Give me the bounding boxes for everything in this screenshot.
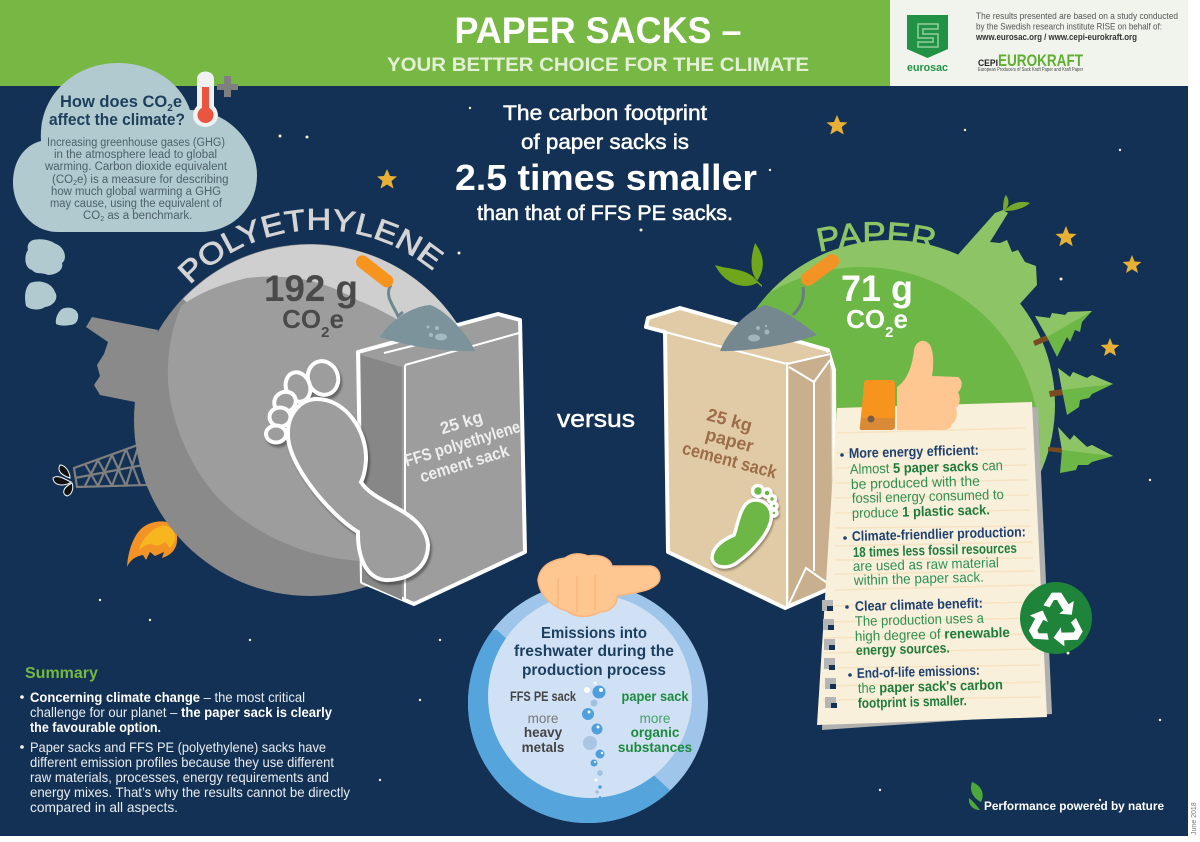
callout body: 2	[100, 216, 104, 223]
icon: leaf	[969, 782, 983, 810]
column: paper sack: substances	[618, 740, 692, 755]
unit: CO2e: 2	[885, 324, 893, 341]
emission value: 71 g: 71 g	[841, 268, 913, 309]
icon: small clouds	[25, 239, 78, 326]
panel: freshwater emissions	[468, 553, 708, 823]
callout body: in the atmosphere lead to global	[54, 149, 217, 161]
icon: footprint (paper)	[712, 486, 777, 567]
callout body: how much global warming a GHG	[51, 186, 221, 198]
icon: sprout on chimney	[1003, 195, 1030, 211]
callout heading: e	[173, 93, 182, 111]
panel heading: Emissions into	[541, 625, 647, 642]
unit: CO2e: CO	[846, 304, 885, 334]
logo: eurosac	[907, 15, 948, 74]
panel heading: production process	[522, 662, 666, 679]
logo: CEPI Eurokraft: EUROKRAFT	[998, 51, 1083, 70]
panel: summary: different emission profiles because they use different	[30, 754, 334, 770]
benefit: more energy efficient: produce 1 plastic sack.	[852, 501, 990, 521]
benefit: climate-friendlier production: Climate-friendlier production:	[852, 523, 1026, 544]
panel: summary: compared in all aspects.	[30, 799, 178, 815]
benefit: more energy efficient: More energy efficient:	[849, 442, 979, 461]
callout body: as a benchmark.	[104, 210, 192, 222]
icon: thumbs up	[860, 341, 962, 430]
callout body: Increasing greenhouse gases (GHG)	[47, 137, 225, 149]
study note	[975, 11, 1178, 43]
column: FFS PE sack: FFS PE sack	[510, 689, 576, 704]
study note: www.eurosac.org / www.cepi-eurokraft.org	[975, 32, 1137, 43]
benefit: end-of-life emissions: footprint is smaller.	[858, 692, 967, 711]
panel: summary: raw materials, processes, energy requirements and	[30, 769, 329, 785]
column: FFS PE sack: more	[528, 711, 558, 726]
panel: benefits note	[817, 402, 1052, 730]
panel: summary: Paper sacks and FFS PE (polyethylene) sacks have	[30, 739, 326, 755]
sack: polyethylene	[358, 314, 525, 604]
trees	[1033, 311, 1113, 473]
logo: CEPI Eurokraft: CEPI	[978, 58, 998, 68]
arc label: POLYETHYLENE: POLYETHYLENE	[177, 208, 444, 284]
panel: summary	[20, 665, 350, 815]
callout body: CO	[83, 210, 100, 222]
notebook holes	[822, 600, 837, 708]
side panel	[361, 355, 402, 600]
benefit: clear climate benefit: The production uses a	[855, 610, 984, 629]
benefit: clear climate benefit: high degree of renewable	[855, 624, 1010, 644]
unit: CO2e: e	[893, 304, 908, 334]
headline: than that of FFS PE sacks.	[477, 202, 733, 225]
headline: of paper sacks is	[521, 131, 689, 154]
sack label: 25 kg	[438, 407, 485, 438]
sack label	[680, 405, 780, 483]
icon: fist with thumb sideways	[538, 554, 660, 616]
callout heading: 2	[167, 103, 173, 114]
planet: polyethylene	[86, 208, 457, 596]
benefit: climate-friendlier production: within the paper sack.	[853, 569, 984, 588]
sack label: cement sack	[680, 438, 780, 483]
factory silhouette	[955, 210, 1037, 307]
planet: paper	[715, 195, 1113, 473]
icon: footprint (polyethylene)	[266, 357, 428, 580]
headline: 2.5 times smaller	[455, 157, 757, 198]
sack label: cement sack	[418, 441, 512, 486]
icon: recycling	[1020, 582, 1092, 654]
column: FFS PE sack: metals	[522, 740, 564, 755]
icon: trowel (paper)	[720, 251, 842, 351]
header banner	[0, 0, 890, 86]
title: PAPER SACKS –	[454, 10, 742, 51]
study note: by the Swedish research institute RISE on behalf of:	[976, 22, 1162, 32]
benefit: more energy efficient	[840, 442, 1004, 521]
benefit: climate-friendlier production: are used as raw material	[853, 554, 999, 574]
date: June 2018	[1191, 802, 1198, 835]
slogan	[969, 782, 1164, 813]
logo: CEPI Eurokraft	[978, 51, 1083, 73]
icon: trowel (polyethylene)	[353, 253, 475, 351]
logo panel	[890, 0, 1188, 86]
unit: CO2e: CO	[282, 304, 321, 334]
icon: bubbles	[582, 682, 606, 798]
icon: oil drops	[53, 465, 73, 496]
panel heading	[514, 625, 674, 679]
benefit: more energy efficient: Almost 5 paper sacks can	[850, 457, 1003, 477]
panel: summary: the favourable option.	[30, 719, 161, 735]
headline: The carbon footprint	[503, 102, 707, 125]
column: paper sack: organic	[631, 725, 680, 740]
callout body	[44, 137, 228, 223]
versus label: versus	[557, 406, 635, 433]
column: paper sack: paper sack	[622, 689, 689, 704]
column: FFS PE sack	[510, 689, 576, 755]
callout: how does CO2e affect the climate	[13, 63, 257, 232]
panel: summary: energy mixes. That’s why the results cannot be directly	[30, 784, 350, 800]
slogan: Performance powered by nature	[984, 799, 1164, 813]
benefit: clear climate benefit	[845, 595, 1010, 658]
callout heading	[49, 93, 185, 129]
icon: oil derrick	[53, 445, 147, 496]
headline	[455, 102, 757, 225]
logo: eurosac: eurosac	[907, 62, 948, 74]
icon: leaves	[715, 243, 763, 287]
benefit: climate-friendlier production	[843, 523, 1026, 588]
side panel	[789, 352, 833, 604]
sack label	[402, 407, 523, 486]
callout heading: affect the climate?	[49, 111, 185, 129]
unit: CO2e: e	[329, 304, 344, 334]
benefit: end-of-life emissions	[848, 662, 1003, 711]
callout body: warming. Carbon dioxide equivalent	[44, 161, 228, 173]
callout body: e) is a measure for describing	[77, 174, 228, 186]
benefit: clear climate benefit: energy sources.	[856, 640, 950, 658]
arc label: PAPER: PAPER	[816, 222, 935, 252]
stars and dots	[99, 107, 1161, 801]
icon: thermometer	[193, 72, 238, 127]
benefit: end-of-life emissions: the paper sack's carbon	[858, 676, 1003, 696]
callout body: (CO	[52, 174, 73, 186]
column: FFS PE sack: heavy	[524, 725, 563, 740]
column: paper sack: more	[640, 711, 670, 726]
sack label: 25 kg	[705, 405, 754, 436]
subtitle: YOUR BETTER CHOICE FOR THE CLIMATE	[387, 55, 809, 76]
benefit: more energy efficient: be produced with the	[851, 473, 980, 492]
unit: CO2e: 2	[321, 324, 329, 341]
summary heading: Summary	[25, 665, 98, 682]
sack label: paper	[703, 424, 756, 456]
cloud	[13, 63, 257, 232]
callout body: 2	[73, 180, 77, 187]
benefit: end-of-life emissions: End-of-life emissions:	[857, 662, 980, 681]
column: paper sack	[618, 689, 692, 755]
panel: summary: challenge for our planet – the paper sack is clearly	[30, 704, 332, 720]
benefit: clear climate benefit: Clear climate benefit:	[855, 595, 983, 614]
benefit: climate-friendlier production: 18 times less fossil resources	[853, 540, 1017, 560]
sack label: FFS polyethylene	[402, 417, 523, 470]
icon: flame	[127, 521, 177, 567]
panel: summary: Concerning climate change – the most critical	[30, 689, 305, 705]
emission value: 192 g: 192 g	[264, 268, 358, 309]
panel heading: freshwater during the	[514, 643, 674, 660]
benefit: more energy efficient: fossil energy consumed to	[852, 486, 1004, 506]
logo: CEPI Eurokraft: European Producers of Sack Kraft Paper and Kraft Paper	[978, 67, 1083, 73]
factory silhouette	[86, 317, 158, 404]
study note: The results presented are based on a study conducted	[976, 11, 1178, 22]
callout heading: How does CO	[60, 93, 167, 111]
callout body: may cause, using the equivalent of	[50, 198, 223, 210]
sack: paper	[646, 308, 835, 608]
